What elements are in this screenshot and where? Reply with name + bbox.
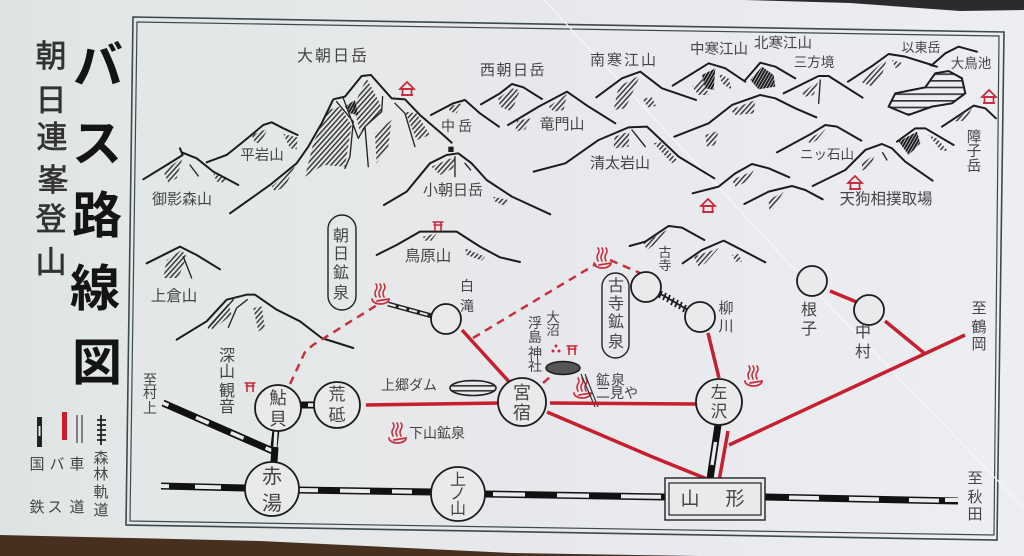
legend symbol: forest railway <box>97 415 106 445</box>
bus route: Yamagata to Aterazawa <box>719 431 728 481</box>
label: Oh-Asahi-dake: 大朝日岳 <box>297 47 369 65</box>
mountain: Kodera north <box>630 226 704 250</box>
bus route: Yanagawa to Aterazawa <box>708 333 719 378</box>
hot spring pill: Asahi <box>328 215 356 310</box>
station: Miyajuku: 宮宿 <box>513 383 531 423</box>
mountain: Naka-Kanae <box>673 63 745 95</box>
station: Neko <box>797 266 827 296</box>
icon: hut at Shoji <box>982 90 996 103</box>
legend symbol: road <box>77 415 82 443</box>
wooden table edge <box>0 535 700 556</box>
label: Tengu Sumo-tori-ba: 天狗相撲取場 <box>839 190 933 208</box>
label: Fukayama Kannon: 深山観音 <box>219 347 235 416</box>
road marker by Futami <box>581 374 598 407</box>
subtitle: Asahi range climbing: 朝日連峯登山 <box>36 39 68 280</box>
label: Seidaiwa-yama: 清太岩山 <box>590 155 650 172</box>
icon: Asahi hot spring <box>372 284 389 304</box>
station: Akayu: 赤湯 <box>262 465 282 515</box>
icon: hut at Oh-Asahi <box>400 82 414 95</box>
mountain: Shoji-dake <box>942 106 996 127</box>
mountain: Oh-Asahi <box>230 75 452 213</box>
station: Ayukai <box>255 385 301 431</box>
bus route: Nakamura to junction <box>885 321 924 353</box>
icon: shrine at Ukishima <box>566 346 578 355</box>
station: Miyajuku <box>498 378 546 426</box>
label: Futamiya spring: 二見や <box>596 385 638 401</box>
station: Yamagata: 山形 <box>680 488 745 510</box>
label: Futamiya spring: 鉱泉 <box>596 372 626 388</box>
mountain: Ko-Asahi <box>384 147 550 214</box>
legend symbol: bus <box>62 412 67 440</box>
label: Torihara-yama: 鳥原山 <box>405 247 451 265</box>
station: Akayu <box>245 462 299 516</box>
station: Kaminoyama <box>431 467 485 521</box>
mountain: Nishi-Asahi <box>481 84 542 112</box>
bus route: Arato to Miyajuku <box>366 403 502 405</box>
hot spring icons <box>372 248 762 443</box>
mountain: south ridge one <box>693 164 789 193</box>
hut icons <box>400 82 996 212</box>
label: Kamikura-yama: 上倉山 <box>151 287 197 305</box>
label: Nakamura: 中村 <box>855 323 871 361</box>
bus route: Neko to Nakamura <box>830 291 859 303</box>
label: Minami-Kanae-yama: 南寒江山 <box>590 52 658 69</box>
label: Kamigo dam: 上郷ダム <box>381 377 437 393</box>
label: to Murakami: 至村上 <box>143 372 157 416</box>
icon: Shimoyama hot spring <box>389 423 406 443</box>
dashed trail: Ukishima <box>543 372 556 383</box>
bus route: Miyajuku to Aterazawa <box>550 403 696 404</box>
label: Nishi-Asahi-dake: 西朝日岳 <box>480 62 546 79</box>
label: Futatsu-ishi-yama: ニッ石山 <box>800 147 854 162</box>
label: Shirataki: 白滝 <box>460 278 474 314</box>
label: Neko: 根子 <box>801 301 817 338</box>
Kamigo dam lake <box>450 380 496 396</box>
dashed trail: Ayukai to Asahi spring <box>290 305 377 384</box>
railway: main line <box>161 486 958 501</box>
red bus routes <box>290 260 965 481</box>
station: Yamagata <box>665 478 765 520</box>
railway: Aterazawa branch <box>710 425 718 479</box>
legend <box>29 412 109 519</box>
label: Ukishima shrine: 浮島神社 <box>528 315 542 374</box>
station: Aterazawa <box>696 379 742 425</box>
icon: Aterazawa hot spring <box>745 366 762 386</box>
label: Mikage-mori-yama: 御影森山 <box>152 191 212 208</box>
railway: Murakami branch <box>163 403 276 462</box>
label: Yanagawa: 柳川 <box>718 300 734 335</box>
station: Kodera <box>631 272 661 302</box>
label: Ryumon-yama: 竜門山 <box>539 116 585 133</box>
label: Naka-dake: 中岳 <box>441 118 475 134</box>
mountains: north-west quadrant <box>143 75 550 278</box>
mountain: Sanpo-zakai <box>784 76 863 103</box>
mountain: Kamikura <box>147 247 220 278</box>
stations <box>245 266 884 521</box>
icon: hut at ridge <box>701 199 715 212</box>
icon: shrine at Torihara <box>432 222 444 231</box>
station: Kaminoyama: 上ノ山 <box>450 471 466 518</box>
icon: hut at Tengu <box>848 176 862 189</box>
bus route: Miyajuku to Yamagata <box>547 412 707 479</box>
mountain: Futatsu-ishi <box>777 125 861 152</box>
icon: shrine at Fukayama Kannon <box>244 383 256 392</box>
mountain: Kita-Kanae <box>745 63 795 89</box>
legend label: bus: バス <box>47 456 65 516</box>
station: Ayukai: 鮎貝 <box>269 388 287 429</box>
mountain: Naka-dake <box>431 100 499 127</box>
place labels <box>143 278 987 523</box>
station: Aterazawa: 左沢 <box>711 383 728 421</box>
mountain: Kodera south <box>683 241 765 267</box>
red three dots <box>552 344 560 352</box>
station: Nakamura <box>854 295 884 325</box>
mountain labels <box>151 35 991 305</box>
mountain: Tengu <box>813 144 933 186</box>
mountain: Mikage-mori <box>143 148 238 185</box>
mountain: Seidaiwa <box>534 127 714 178</box>
forest railway: Shirataki <box>388 304 432 316</box>
hot spring pill: Asahi: 朝日鉱泉 <box>333 227 349 302</box>
mountain: unnamed ridge <box>674 95 816 147</box>
dashed trail: spring to Kodera <box>610 260 640 273</box>
lake: Otori-ike <box>889 71 965 115</box>
railway: Ayukai to Arato <box>301 402 315 408</box>
icon: Kodera hot spring <box>594 248 611 268</box>
label: to Tsuruoka: 至鶴岡 <box>971 300 987 353</box>
legend label: road: 車道 <box>69 456 85 516</box>
mountain: Torihara <box>377 232 520 262</box>
forest railway: Kodera to Yanagawa <box>659 291 688 312</box>
station: Shirataki <box>431 304 461 334</box>
mountain: Minami-Kanae <box>596 72 696 110</box>
label: Kita-Kanae-yama: 北寒江山 <box>754 35 812 52</box>
label: Otori-ike: 大鳥池 <box>951 56 991 71</box>
legend label: national rail: 国鉄 <box>29 456 45 516</box>
label: Ito-dake: 以東岳 <box>901 40 941 55</box>
label: to Akita: 至秋田 <box>967 470 983 523</box>
dashed trail: to Kodera spring <box>473 264 596 338</box>
label: Sanpo-zakai: 三方境 <box>794 55 835 70</box>
label: Hiraiwa-yama: 平岩山 <box>240 147 284 164</box>
label: Kodera: 古寺 <box>658 245 672 273</box>
label: Futamiya spring <box>596 372 638 401</box>
title: bus route map: バス路線図 <box>70 38 123 391</box>
station: Arato: 荒砥 <box>328 385 346 425</box>
label: Shoji-dake: 障子岳 <box>967 129 981 175</box>
mountain: Fukayama <box>177 295 353 348</box>
paper crease <box>544 0 1024 508</box>
bus route: Shirataki to Miyajuku <box>462 330 512 385</box>
mountain: Hiraiwa <box>207 122 298 162</box>
mountains: north-east quadrant <box>508 47 996 267</box>
mountain: south ridge two <box>744 186 823 212</box>
Onuma pond <box>546 362 580 374</box>
station: Arato <box>314 382 360 428</box>
legend symbol: national rail <box>37 417 42 447</box>
hot spring pill: Kodera: 古寺鉱泉 <box>608 277 624 351</box>
label: Naka-Kanae-yama: 中寒江山 <box>690 41 748 58</box>
label: Ko-Asahi-dake: 小朝日岳 <box>423 182 483 199</box>
icon: Futami hot spring <box>574 378 591 398</box>
mountain: dark peak <box>897 128 954 155</box>
shrine icons <box>244 222 578 392</box>
mountain: Ryumon <box>508 92 615 132</box>
dark edge top right <box>745 0 1024 11</box>
label: Onuma: 大沼 <box>546 310 560 338</box>
label: Shimoyama spring: 下山鉱泉 <box>409 425 465 441</box>
hot spring pill: Kodera <box>602 273 629 358</box>
legend label: forest railway: 森林軌道 <box>93 450 109 519</box>
station: Yanagawa <box>685 302 715 332</box>
bus route: to Tsuruoka <box>729 335 965 445</box>
mountain: Ito-dake <box>848 47 977 87</box>
